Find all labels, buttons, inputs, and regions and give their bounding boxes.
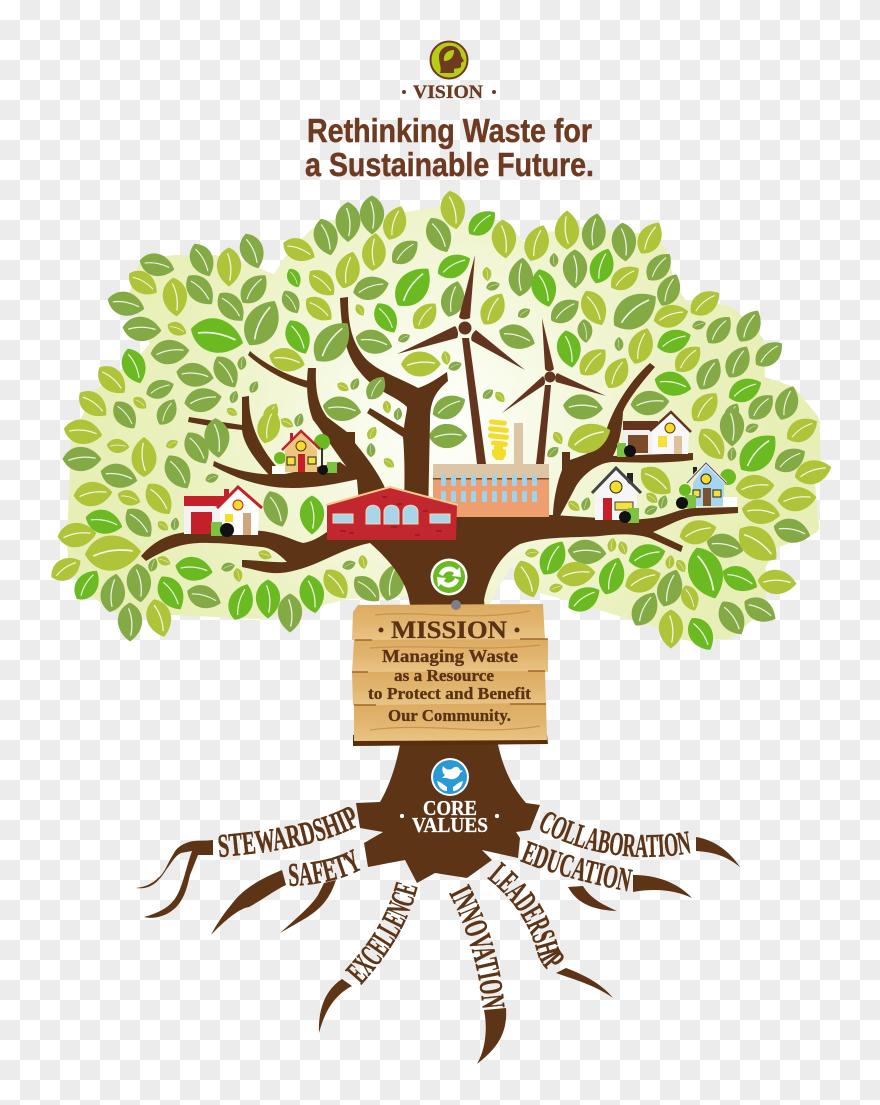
tree canopy pale background (74, 212, 814, 634)
vision icon (430, 42, 468, 78)
wind turbine small (502, 318, 606, 464)
root: education: EDUCATION (520, 840, 633, 892)
house: white with red roof (184, 487, 262, 537)
right limb (553, 363, 693, 518)
vision statement title: Rethinking Waste for (307, 112, 592, 149)
mission text: Our Community. (388, 706, 511, 725)
root: innovation (449, 884, 506, 1064)
root: leadership: LEADERSHIP (487, 861, 564, 970)
upper left limb (248, 351, 386, 515)
house: white with brown roof (617, 412, 691, 457)
root: innovation: INNOVATION (449, 884, 505, 1008)
root: stewardship (136, 807, 356, 918)
mission text: as a Resource (394, 666, 494, 685)
root: education (520, 840, 692, 911)
factory (433, 423, 549, 517)
root: leadership (487, 861, 613, 998)
tree branches (141, 297, 738, 883)
foreground leaves over branches (203, 314, 615, 459)
root: stewardship: STEWARDSHIP (218, 807, 356, 858)
vision label: VISION (413, 82, 483, 103)
vision statement title (305, 112, 594, 183)
core values label (400, 796, 499, 837)
core values label: VALUES (412, 813, 488, 837)
root: safety (211, 848, 360, 935)
energy-saving light bulb (488, 419, 509, 460)
icon: bird and hands badge (431, 758, 469, 796)
root: safety: SAFETY (288, 848, 360, 886)
mission sign board (352, 600, 548, 746)
root: collaboration: COLLABORATION (540, 812, 690, 858)
main trunk with lower branches and root hub (141, 507, 738, 883)
mission heading: MISSION (391, 617, 507, 644)
house: tan with red roof (272, 431, 337, 475)
icon: recycling badge (430, 558, 468, 596)
house shelf branch (188, 396, 362, 488)
nail (451, 600, 461, 610)
root: collaboration (540, 812, 740, 867)
mission text: Managing Waste (382, 646, 518, 666)
house: white with grey roof (592, 468, 641, 523)
wind turbine large (397, 255, 525, 464)
mission text (368, 646, 531, 725)
mission text: to Protect and Benefit (368, 684, 531, 703)
house: blue with recycling bin (676, 463, 737, 509)
canopy leaves (46, 189, 834, 656)
red school building (326, 487, 458, 540)
central upright limb (340, 297, 448, 520)
core values label: CORE (423, 796, 477, 820)
vision statement title: a Sustainable Future. (305, 146, 594, 183)
root: excellence: EXCELLENCE (344, 882, 418, 985)
root: excellence (318, 882, 418, 1033)
